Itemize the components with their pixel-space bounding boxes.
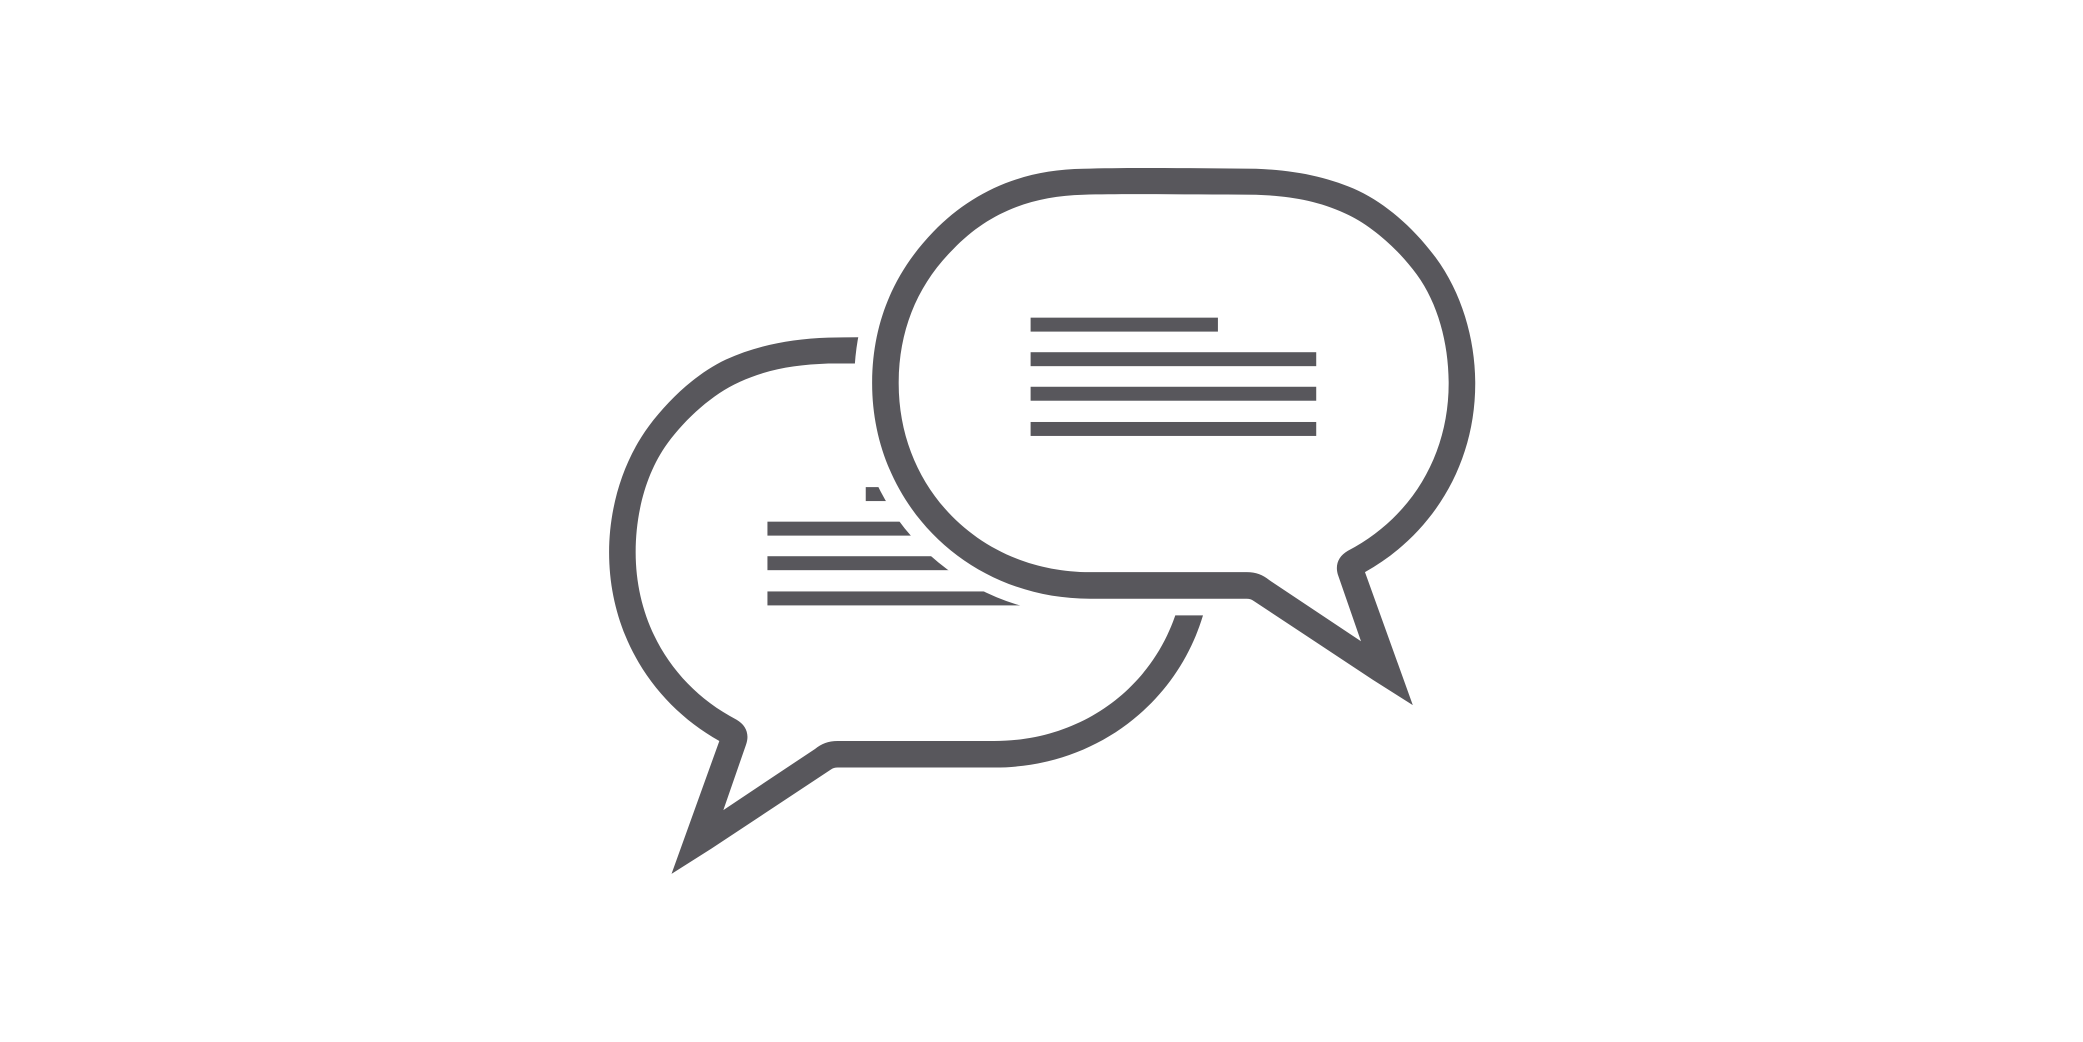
icon: right speech bubble (front) <box>871 167 1475 705</box>
icon: left speech bubble (mirrored, behind) <box>609 337 1212 874</box>
text lines in right bubble <box>1031 318 1316 436</box>
